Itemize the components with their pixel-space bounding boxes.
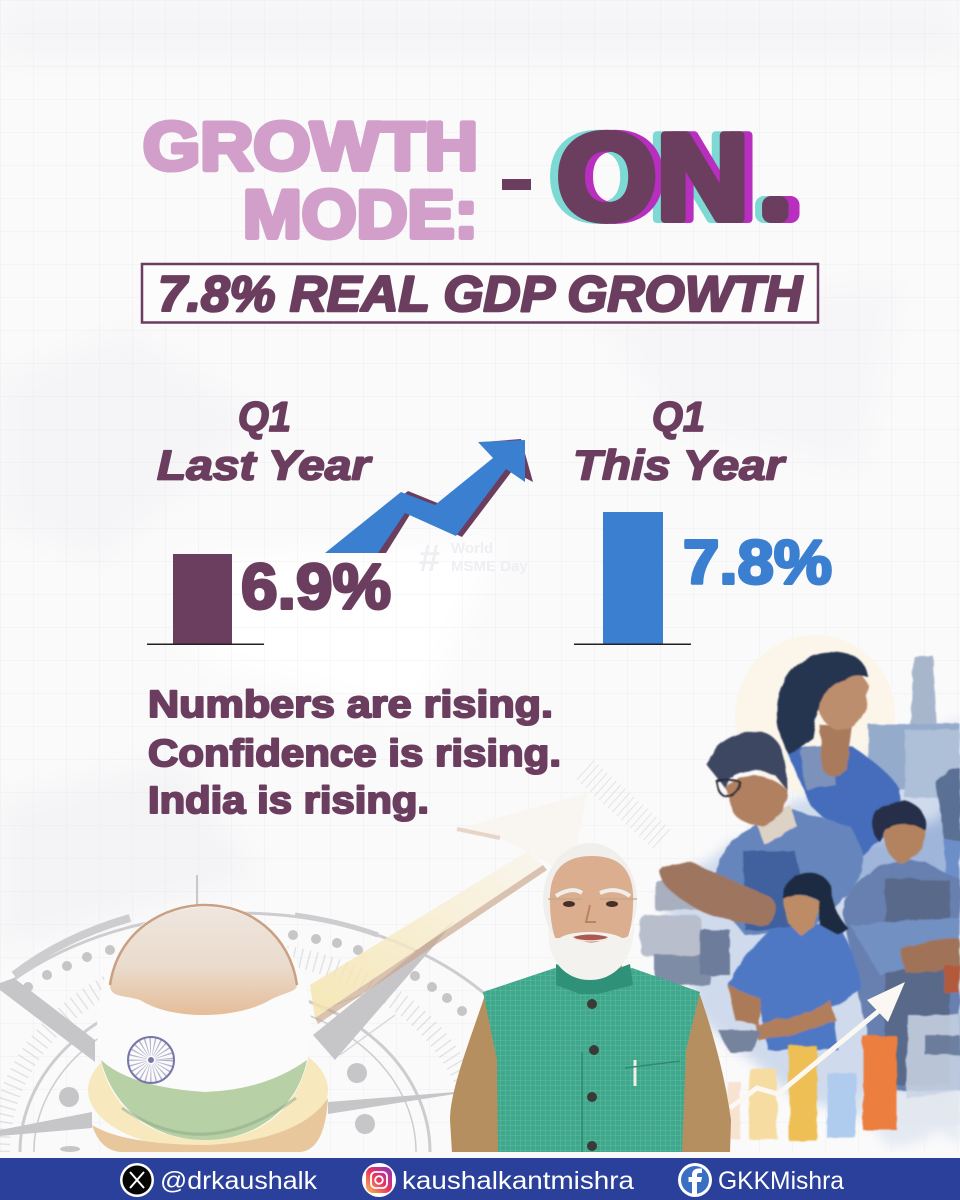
value: 6.9% [241, 550, 391, 622]
icon: Facebook [678, 1163, 712, 1197]
kurta sleeves [450, 995, 731, 1153]
chart: Q1 last year [147, 393, 391, 645]
message text [148, 684, 561, 822]
label: Q1 [652, 393, 705, 441]
truck [904, 1013, 960, 1118]
rising arrow [325, 439, 533, 553]
gold plate [88, 1057, 328, 1152]
pale sun [735, 635, 895, 795]
illustration: compass, tricolour globe and arrow [0, 770, 665, 1152]
ashoka chakra [128, 1037, 174, 1083]
subtitle box: 7.8% REAL GDP GROWTH [158, 266, 803, 322]
label [573, 393, 787, 488]
icon: X [120, 1163, 154, 1197]
rising white arrow [730, 982, 905, 1108]
message text: Numbers are rising. [148, 684, 553, 726]
buttons and pen [582, 999, 680, 1153]
title: Growth Mode: MODE: [243, 176, 478, 252]
handle: Instagram: kaushalkantmishra [402, 1167, 634, 1195]
faint watermark: # [419, 538, 440, 580]
footer bar [0, 1158, 960, 1200]
baseline [574, 644, 691, 645]
rising gold arrow [310, 793, 587, 1024]
illustration: workers and industry watercolour [640, 635, 960, 1141]
portrait: Modi [450, 843, 731, 1153]
baseline [147, 644, 264, 645]
worker: man with glasses [660, 731, 863, 935]
title: Growth Mode [143, 108, 478, 252]
bar [173, 554, 232, 644]
vest [483, 968, 700, 1153]
handle: Facebook: GKKMishra [718, 1167, 844, 1195]
title dash [502, 179, 531, 190]
label: Q1 [238, 393, 291, 441]
label: Last Year [157, 442, 373, 488]
collar [556, 964, 633, 994]
message text: Confidence is rising. [148, 733, 561, 775]
machinery [640, 880, 730, 985]
watercolour wash [660, 720, 960, 1140]
title: ON with offset colours: . [760, 160, 777, 227]
factory [868, 656, 960, 890]
title: Growth Mode: GROWTH [143, 108, 478, 184]
title: ON with offset colours: . [778, 160, 795, 227]
worker: man with crossed arms [843, 802, 960, 1090]
label: This Year [573, 442, 787, 488]
message text: India is rising. [148, 780, 429, 822]
worker: woman at bench [718, 872, 862, 1052]
diagonal hatch [585, 770, 665, 842]
title: ON with offset colours: ON [565, 109, 757, 245]
icon: Instagram [362, 1163, 396, 1197]
faint watermark [419, 538, 528, 580]
chart: Q1 this year [573, 393, 832, 645]
title: ON with offset colours: . [767, 160, 784, 227]
worker: woman in saree [777, 652, 903, 856]
bar [603, 512, 663, 644]
faint watermark: MSME Day [451, 558, 528, 575]
label [157, 393, 373, 488]
title: ON with offset colours: ON [557, 109, 749, 245]
title: ON with offset colours: ON [549, 109, 741, 245]
bar chart [727, 1036, 897, 1141]
vest weave [483, 968, 700, 1153]
tricolour globe [97, 905, 311, 1140]
faint watermark: World [451, 540, 493, 557]
compass rose [0, 875, 484, 1152]
neck [618, 964, 622, 968]
head [543, 843, 637, 980]
handle: X: @drkaushalk [160, 1167, 318, 1195]
value: 7.8% [683, 528, 832, 598]
